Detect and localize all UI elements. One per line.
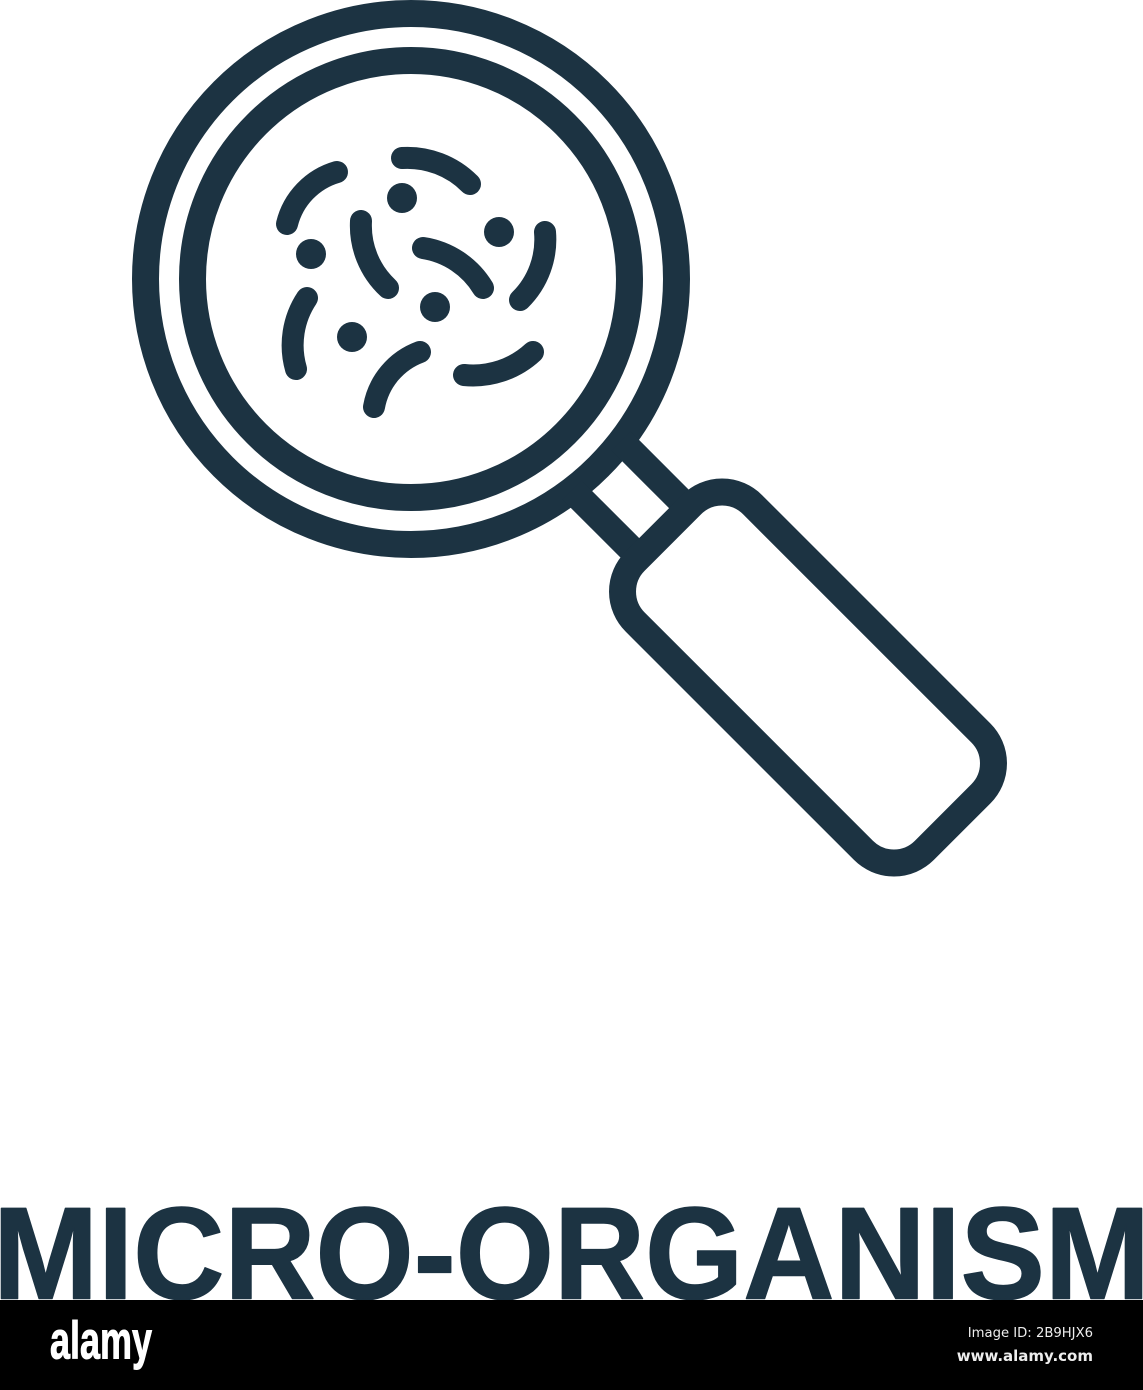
magnifier outer ring bbox=[146, 14, 676, 544]
bacteria rods bbox=[287, 158, 545, 407]
image id: Image ID: 2B9HJX6 bbox=[968, 1326, 1093, 1341]
footer bar bbox=[0, 1300, 1143, 1390]
website: www.alamy.com bbox=[957, 1347, 1093, 1365]
cocci dots bbox=[296, 183, 514, 352]
magnifier inner ring bbox=[192, 60, 630, 498]
alamy logo: alamy bbox=[50, 1312, 152, 1370]
icon: magnifying glass bbox=[146, 14, 1011, 881]
icon: micro-organisms bbox=[287, 158, 545, 407]
magnifier handle bbox=[605, 474, 1011, 881]
magnifier neck bbox=[572, 441, 690, 558]
